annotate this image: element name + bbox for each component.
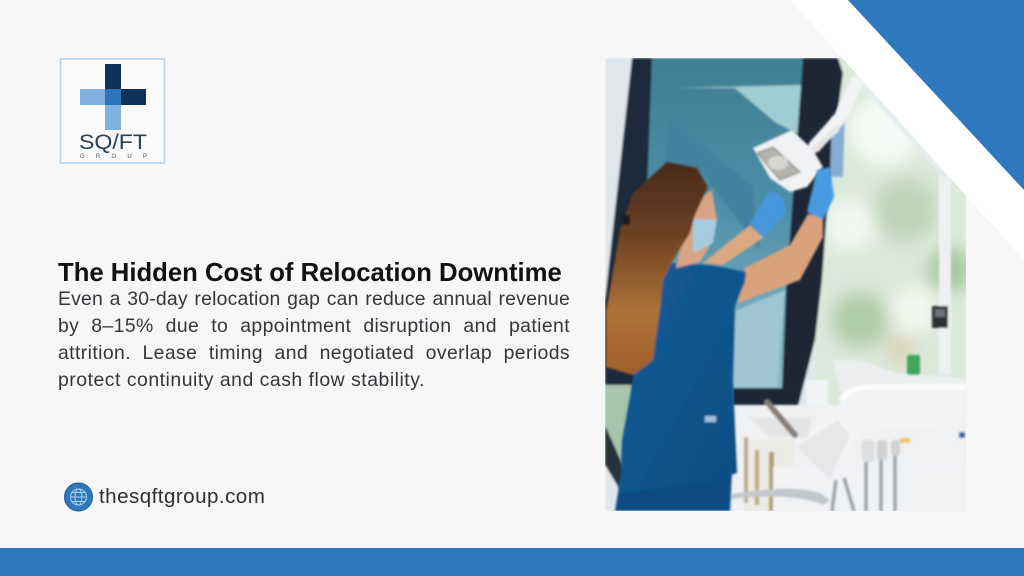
blue corner triangle bbox=[848, 0, 1024, 190]
logo: SQ/FT bbox=[79, 131, 147, 154]
dental chair back bbox=[605, 383, 633, 464]
photo background: wall, window and garden bbox=[605, 58, 972, 511]
website url: thesqftgroup.com bbox=[99, 485, 265, 508]
scrub top bbox=[620, 263, 746, 493]
body paragraph bbox=[58, 288, 570, 391]
heading: The Hidden Cost of Relocation Downtime bbox=[58, 259, 562, 287]
body paragraph: by 8–15% due to appointment disruption and patient bbox=[58, 315, 570, 337]
body paragraph: attrition. Lease timing and negotiated overlap periods bbox=[58, 342, 570, 364]
equipment: dental unit, tray and hoses bbox=[732, 175, 966, 511]
long hair bbox=[606, 162, 708, 375]
logo: GROUP bbox=[80, 154, 147, 160]
near arm and glove bbox=[738, 214, 823, 303]
logo bbox=[60, 59, 164, 163]
icon: globe bbox=[64, 483, 92, 511]
bottom blue bar bbox=[0, 548, 1024, 576]
lamp and articulated arm bbox=[753, 77, 948, 192]
body paragraph: protect continuity and cash flow stability. bbox=[58, 369, 425, 391]
far arm and glove bbox=[703, 225, 763, 265]
body paragraph: Even a 30-day relocation gap can reduce annual revenue bbox=[58, 288, 570, 310]
white diagonal band bbox=[790, 0, 1024, 260]
trousers bbox=[615, 470, 732, 511]
neck, face and mask bbox=[676, 190, 717, 268]
photo: dental assistant adjusting a lamp bbox=[605, 58, 972, 511]
nurse in blue scrubs bbox=[606, 162, 834, 511]
